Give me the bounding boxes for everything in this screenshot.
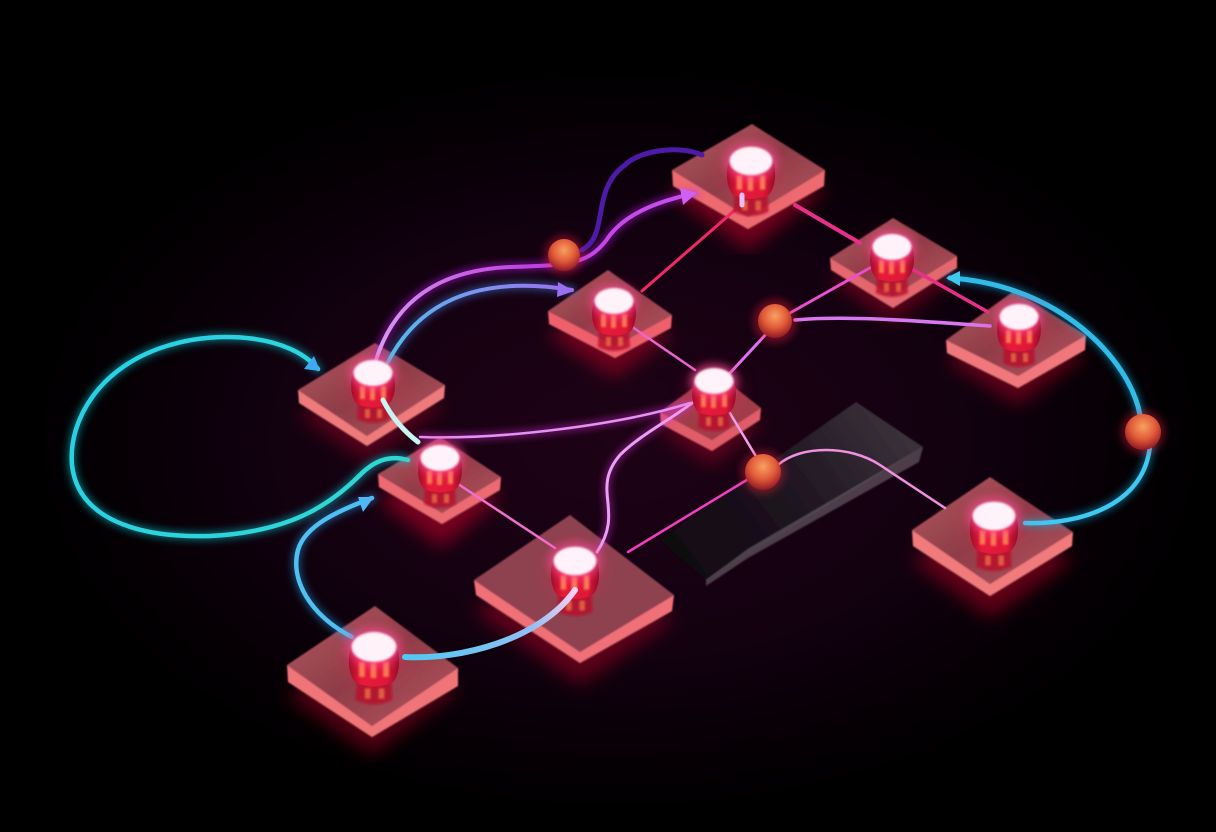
ball: centre right node [753,299,797,343]
thin wires [420,205,990,552]
arrow: cyan curve from ball to far right [946,271,1140,415]
plate: bottom left [287,606,458,755]
plate: upper right [830,218,957,322]
wire: blue from bottom left to large plate [405,590,575,657]
plate: left upper [298,343,445,462]
wire: left middle to large plate [455,482,555,548]
glass strip [660,402,923,586]
wire: large plate to centre [597,403,692,552]
wire: ball to centre [730,332,768,373]
plate: far right [946,291,1086,405]
bead: upper middle [587,284,641,351]
plate: left middle [378,437,501,548]
wire: upper right to ball [790,265,875,313]
plate: centre [660,372,761,465]
wire: lower ball to bottom right [778,450,945,508]
bead: bottom right [964,497,1024,571]
bead: upper right [865,230,919,297]
wire: magenta highlight in top bead [740,195,744,205]
ball: far right node [1121,410,1165,454]
plate: top centre [672,124,825,250]
wire: upper middle to centre [625,322,695,370]
ball: upper left node [544,235,584,275]
wire: white cyan between left beads [383,400,418,442]
wire: cyan from bottom right to ball [1025,445,1150,523]
arrow: blue curve from bottom left to left middle [296,497,374,637]
bead: centre [687,364,741,431]
wire: ball to far right [795,318,990,326]
ball: lower centre node [741,450,785,494]
arrow: violet curve to top centre [376,188,697,360]
wire: large plate to lower ball [628,478,750,552]
wire: dark purple from ball to top centre [582,150,702,250]
wire: upper right to far right [910,268,988,312]
bead: far right [992,300,1046,367]
wire: upper middle to top centre [642,210,735,291]
wire: centre to lower ball [722,400,757,458]
wire glow layer [72,193,1150,637]
arrow: blue violet curve to upper middle [388,282,574,362]
wire: left middle to centre [420,403,690,437]
bead: large plate [545,542,605,616]
plate: upper middle [548,270,672,378]
arrow: cyan loop into left plate [72,337,408,536]
bead: left upper [346,356,400,423]
plate: bottom right [912,477,1073,618]
bead: left middle [413,441,467,508]
plate: large bottom centre [474,515,674,685]
wire: top centre to upper right [795,205,860,243]
bead: bottom left [343,627,405,704]
bead: top centre [721,142,781,216]
